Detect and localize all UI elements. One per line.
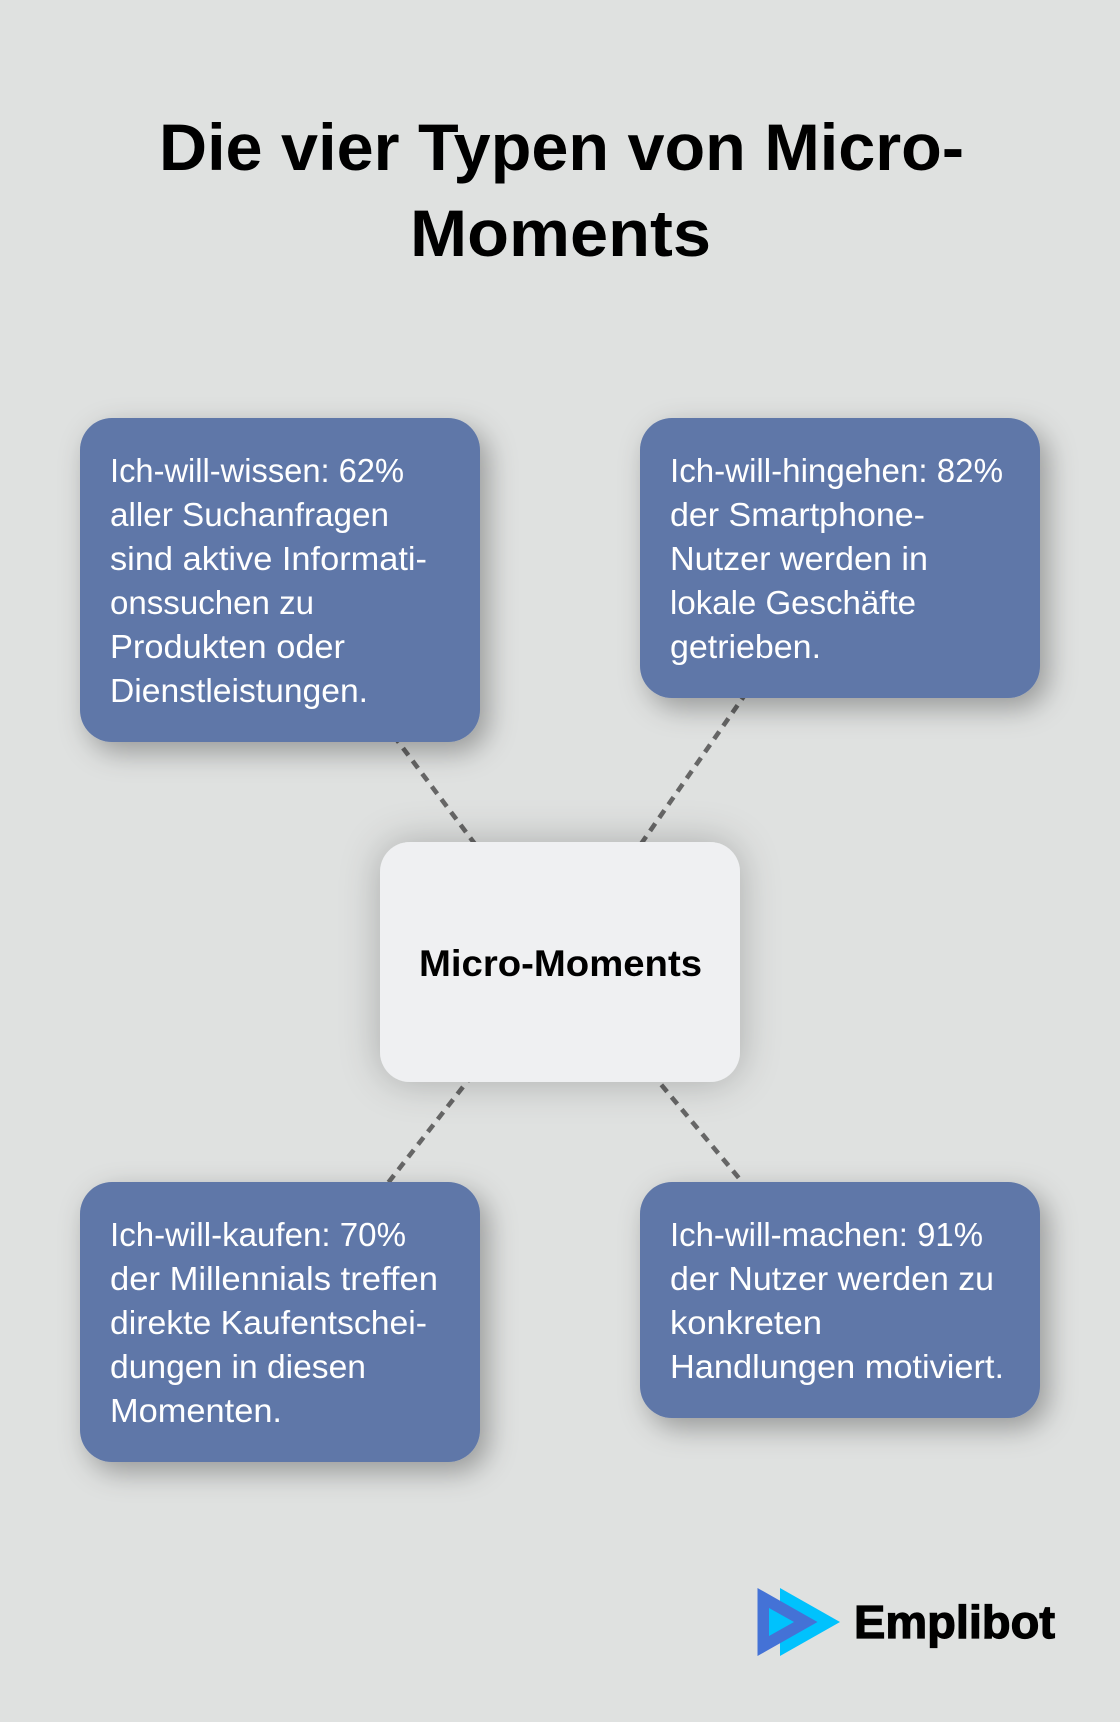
panel: Ich-will-machen: Handlungen motiviert. <box>670 1348 1004 1385</box>
connector: Ich-will-kaufen to centre <box>382 1074 473 1190</box>
panel: Ich-will-machen <box>640 1182 1040 1418</box>
panel: Ich-will-kaufen: Ich-will-kaufen: 70% <box>110 1216 406 1253</box>
panel: Ich-will-hingehen: Nutzer werden in <box>670 540 928 577</box>
panel: Ich-will-kaufen: dungen in diesen <box>110 1348 366 1385</box>
panel: Ich-will-hingehen: lokale Geschäfte <box>670 584 916 621</box>
panel: Ich-will-wissen: Produkten oder <box>110 628 345 665</box>
panel: Ich-will-kaufen <box>80 1182 480 1462</box>
panel: Ich-will-hingehen: getrieben. <box>670 628 821 665</box>
panel: Ich-will-wissen: aller Suchanfragen <box>110 496 389 533</box>
panel: Ich-will-wissen: Ich-will-wissen: 62% <box>110 452 404 489</box>
title <box>159 110 964 270</box>
panel: Ich-will-machen: konkreten <box>670 1304 822 1341</box>
panel: Ich-will-hingehen: der Smartphone- <box>670 496 925 533</box>
panel: Ich-will-machen: der Nutzer werden zu <box>670 1260 994 1297</box>
panel: Ich-will-hingehen: Ich-will-hingehen: 82% <box>670 452 1003 489</box>
panel: Ich-will-kaufen: direkte Kaufentschei- <box>110 1304 427 1341</box>
panel: Ich-will-hingehen <box>640 418 1040 698</box>
panel: Ich-will-wissen: Dienstleistungen. <box>110 672 368 709</box>
connector: Ich-will-wissen to centre <box>393 735 481 852</box>
connector: Ich-will-hingehen to centre <box>635 692 747 852</box>
panel: Ich-will-kaufen: Momenten. <box>110 1392 282 1429</box>
connector: Ich-will-machen to centre <box>651 1072 739 1178</box>
icon: play triangles <box>758 1588 840 1656</box>
logo: Emplibot <box>758 1588 1055 1656</box>
logo wordmark: Emplibot <box>854 1596 1055 1648</box>
title: Moments <box>410 196 711 270</box>
panel: Ich-will-wissen: sind aktive Informati- <box>110 540 427 577</box>
panel: Ich-will-wissen: onssuchen zu <box>110 584 314 621</box>
panel: Micro-Moments centre: Micro-Moments <box>419 943 702 984</box>
panel: Ich-will-wissen <box>80 418 480 742</box>
title: Die vier Typen von Micro- <box>159 110 964 184</box>
panel: Ich-will-kaufen: der Millennials treffen <box>110 1260 438 1297</box>
panel: Micro-Moments centre <box>380 842 740 1082</box>
panel: Ich-will-machen: Ich-will-machen: 91% <box>670 1216 983 1253</box>
